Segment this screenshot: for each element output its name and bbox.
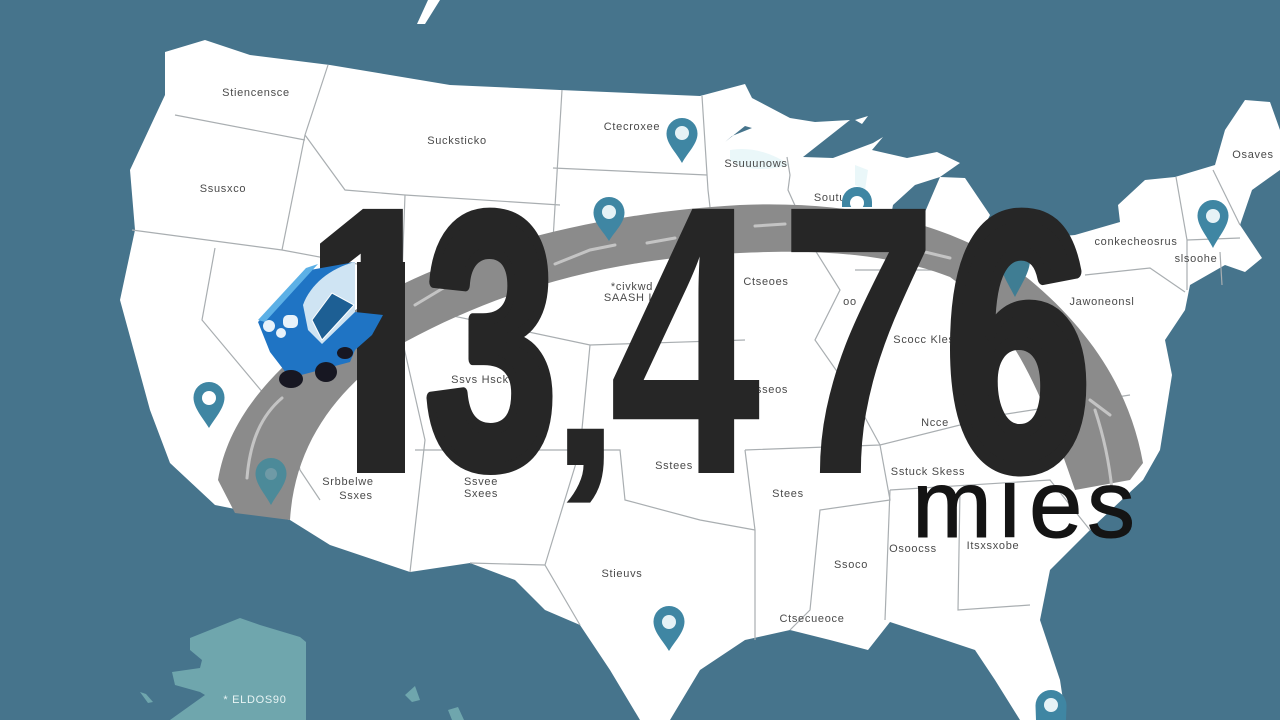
headline number: 13,476 [320,208,1086,503]
state labels: slsoohe [1175,253,1217,265]
state labels: Ssuuunows [724,158,788,170]
state labels: Ssusxco [200,183,246,195]
headline number: 13,476: 6 [946,140,1091,543]
state labels: Jawoneonsl [1069,296,1135,308]
state labels: Osaves [1232,149,1274,161]
state labels: oo [843,296,857,308]
state labels: SAASH IS [604,292,660,304]
state labels: Ncce [921,417,949,429]
pin: New England [1198,200,1228,248]
state labels: Stiencensce [222,87,290,99]
pin: Nevada [194,382,224,428]
state labels: Scocc Kles [893,334,955,346]
state labels: Soutu [814,192,846,204]
state labels: Ctseoes [743,276,789,288]
state labels: Stees [772,488,804,500]
state labels: Osoocss [889,543,937,555]
state labels: Itsxsxobe [967,540,1019,552]
state labels: Sstees [655,460,693,472]
state labels: Sucksticko [427,135,487,147]
state labels: conkecheosrus [1094,236,1178,248]
headline number: 13,476: 1 [289,125,460,555]
pin: Colorado [594,197,624,241]
alaska [140,618,464,720]
state labels: Ssseos [748,384,788,396]
icon: blue truck on the road [258,262,383,388]
pin: Wisconsin [842,187,872,210]
state borders [132,65,1240,640]
state labels: Srbbelwe [322,476,374,488]
pin: South Dakota [666,118,698,163]
state labels: Stieuvs [602,568,642,580]
headline number: 13,476: 3 [425,139,557,542]
state labels: Ssxes [339,490,373,502]
location pins [194,118,1228,720]
state labels: Sstuck Skess [891,466,965,478]
state labels: Ssvs Hsck [451,374,509,386]
state labels: Sxees [464,488,498,500]
state labels: Ssvee [464,476,498,488]
state labels: *civkwd [611,281,653,293]
alaska: * ELDOS90 [223,694,287,706]
headline number: 13,476: 7 [779,125,938,555]
state labels: Ctecroxee [604,121,660,133]
pin: Arizona [256,458,286,505]
state labels [200,87,1274,625]
headline number: 13,476: , [549,246,621,517]
unit label: miles: mles [912,451,1135,558]
pin: Florida [1036,690,1066,720]
pin: Texas [654,606,684,651]
pin: Ohio (behind numeral) [1000,245,1030,297]
headline number: 13,476: 4 [609,126,762,555]
road arc across the country [218,204,1143,520]
state labels: Ctsecueoce [779,613,845,625]
state labels: Ssoco [834,559,868,571]
